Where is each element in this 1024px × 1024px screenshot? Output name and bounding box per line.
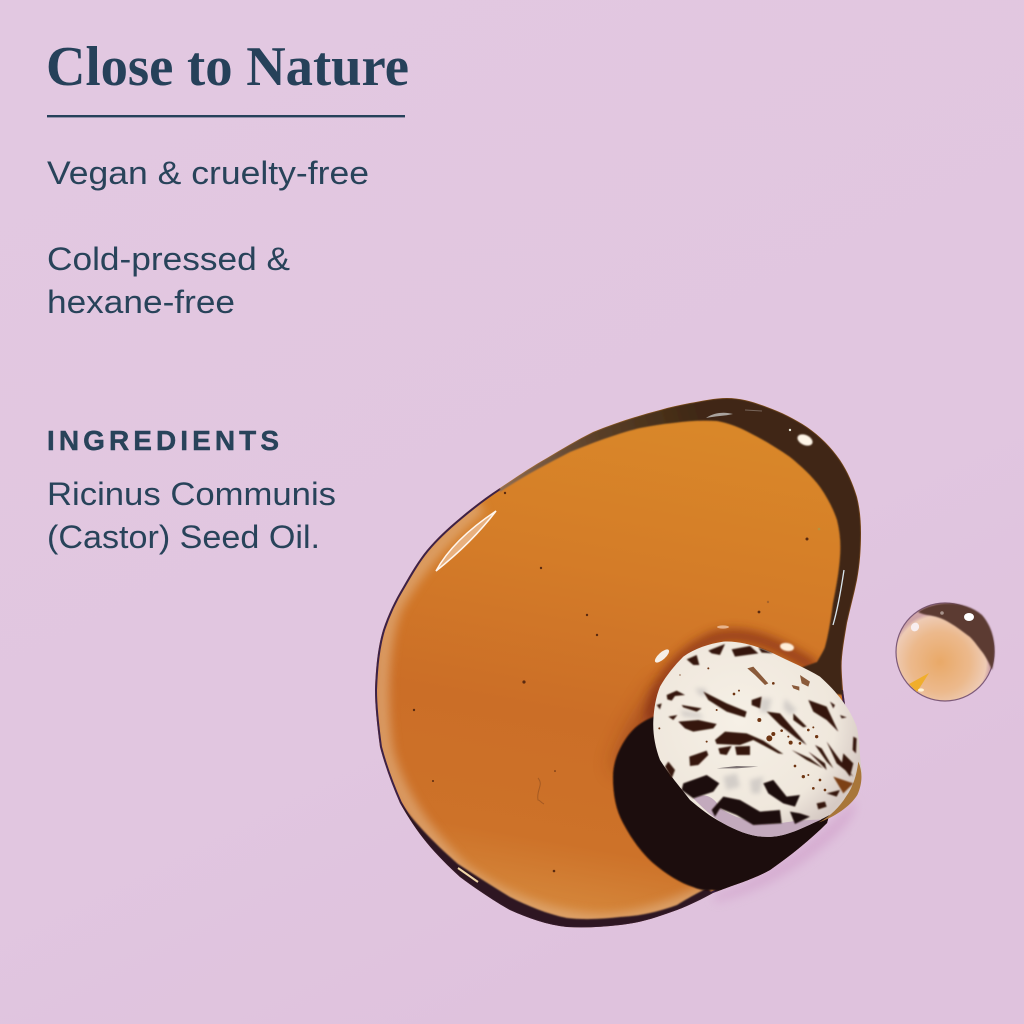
light tan inner edge [381,505,712,922]
soft shadow outside oil [713,800,856,902]
ingredients heading: INGREDIENTS [47,425,279,456]
dark red halo left of seed [610,684,660,770]
seed cast shadow [612,716,830,892]
droplet body [896,603,994,701]
title rule [47,115,405,117]
grey mottling [680,688,797,793]
specks in oil [413,492,820,872]
droplet highlights [909,611,974,692]
text: vegan: Vegan & cruelty-free [47,155,369,191]
seed lilac underside [693,795,822,837]
text: hexane-free: hexane-free [47,284,235,320]
ingredients line 1: Ricinus Communis [47,476,336,512]
small oil droplet [896,603,995,701]
ingredients line 2: (Castor) Seed Oil. [47,519,320,555]
text: cold-pressed: Cold-pressed & [47,241,290,277]
title: Close to Nature [46,36,409,98]
seed tip [818,762,861,823]
upper right dark rim [500,398,861,695]
grey streak [717,766,758,768]
bottom dark crescent [395,795,713,927]
seed markings [657,644,857,825]
seed dots [658,667,826,791]
lighter brown streaks [747,667,810,691]
droplet dark top [918,603,995,670]
thin purple outer edge [375,488,850,927]
castor seed [653,642,862,837]
dark halo near seed [652,636,815,720]
seed body [653,642,862,837]
orange oil body [360,390,870,940]
oil puddle [360,390,870,940]
oil highlights [436,410,844,882]
oil squiggle [538,778,544,804]
